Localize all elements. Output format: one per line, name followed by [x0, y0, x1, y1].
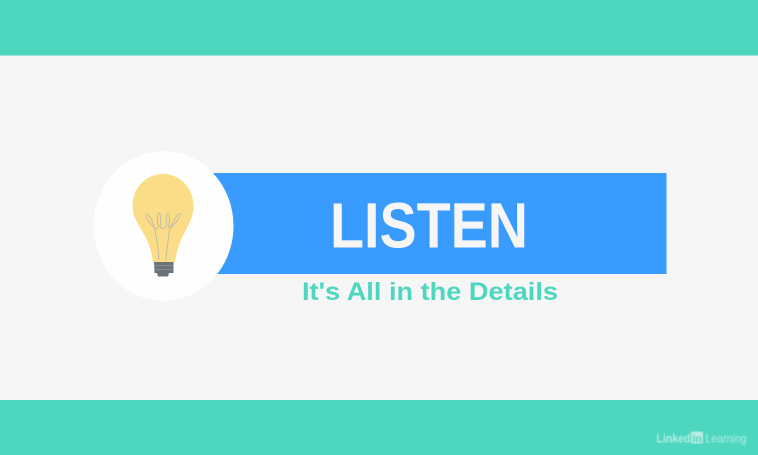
socket threads [154, 266, 174, 270]
logo word: Linked: Linked [656, 432, 690, 446]
white circle behind icon [94, 151, 234, 301]
bulb socket [154, 262, 174, 276]
bulb filament [146, 213, 180, 260]
logo badge: in [691, 432, 703, 444]
logo word: Learning: Learning [706, 432, 746, 446]
logo: LinkedIn Learning [656, 432, 746, 446]
title: LISTEN: LISTEN [330, 190, 528, 262]
subtitle: It's All in the Details [302, 278, 558, 306]
bulb glass [132, 174, 194, 262]
logo badge letters: in [692, 433, 702, 445]
bottom teal band [0, 400, 758, 455]
blue title banner [200, 173, 666, 274]
top teal band [0, 0, 758, 56]
icon: light bulb [132, 174, 194, 276]
